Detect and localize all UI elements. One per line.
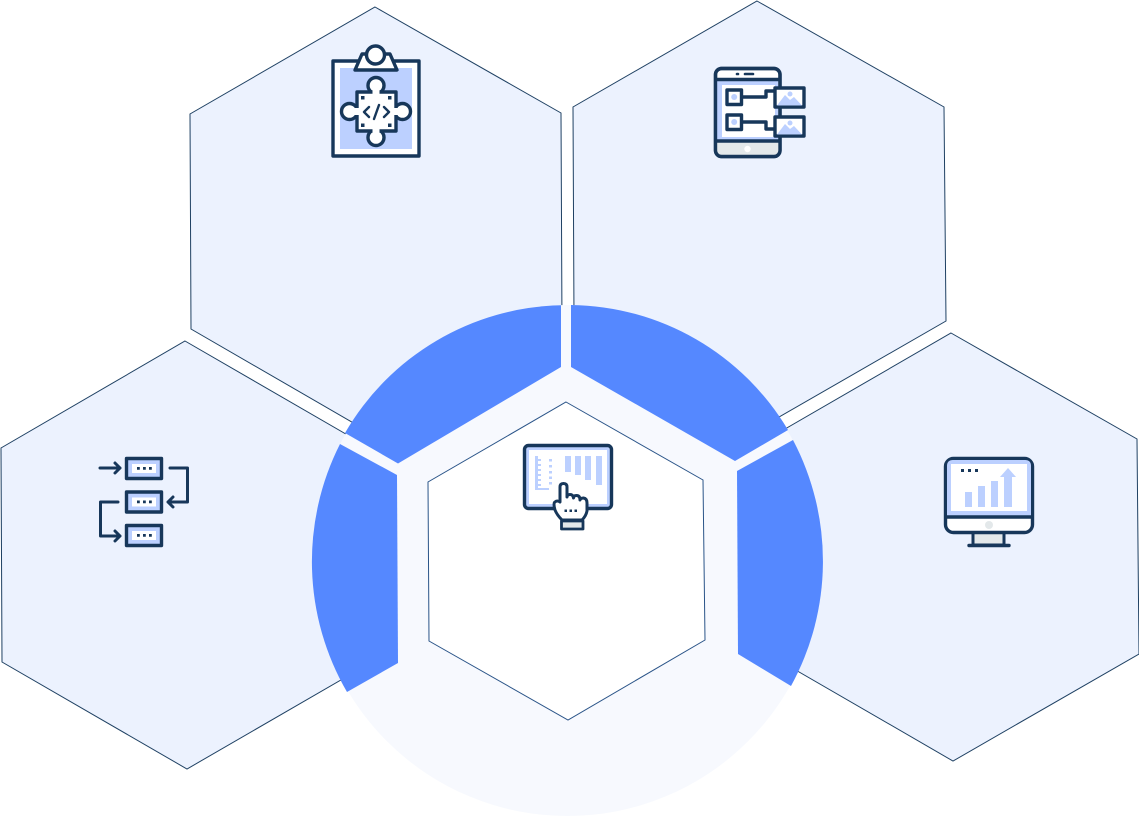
ring segment: right — [737, 440, 823, 686]
hexagon panel: left — [1, 341, 372, 769]
ring segment: left — [312, 444, 398, 692]
icon: process flow — [100, 458, 188, 546]
icon: phone with image flow — [716, 68, 804, 156]
icon: clipboard with puzzle code — [333, 46, 419, 156]
icon: touch screen chart — [524, 446, 612, 529]
ring segment: top right — [571, 305, 788, 461]
hexagon panel: right — [766, 333, 1139, 761]
hexagon panel: top left — [190, 7, 562, 436]
hexagon panel: center — [428, 402, 705, 720]
hexagon panel: top right — [573, 1, 946, 428]
icon: monitor with growth chart — [946, 458, 1032, 546]
central circle backdrop — [312, 305, 823, 816]
ring segment: top left — [345, 305, 561, 464]
